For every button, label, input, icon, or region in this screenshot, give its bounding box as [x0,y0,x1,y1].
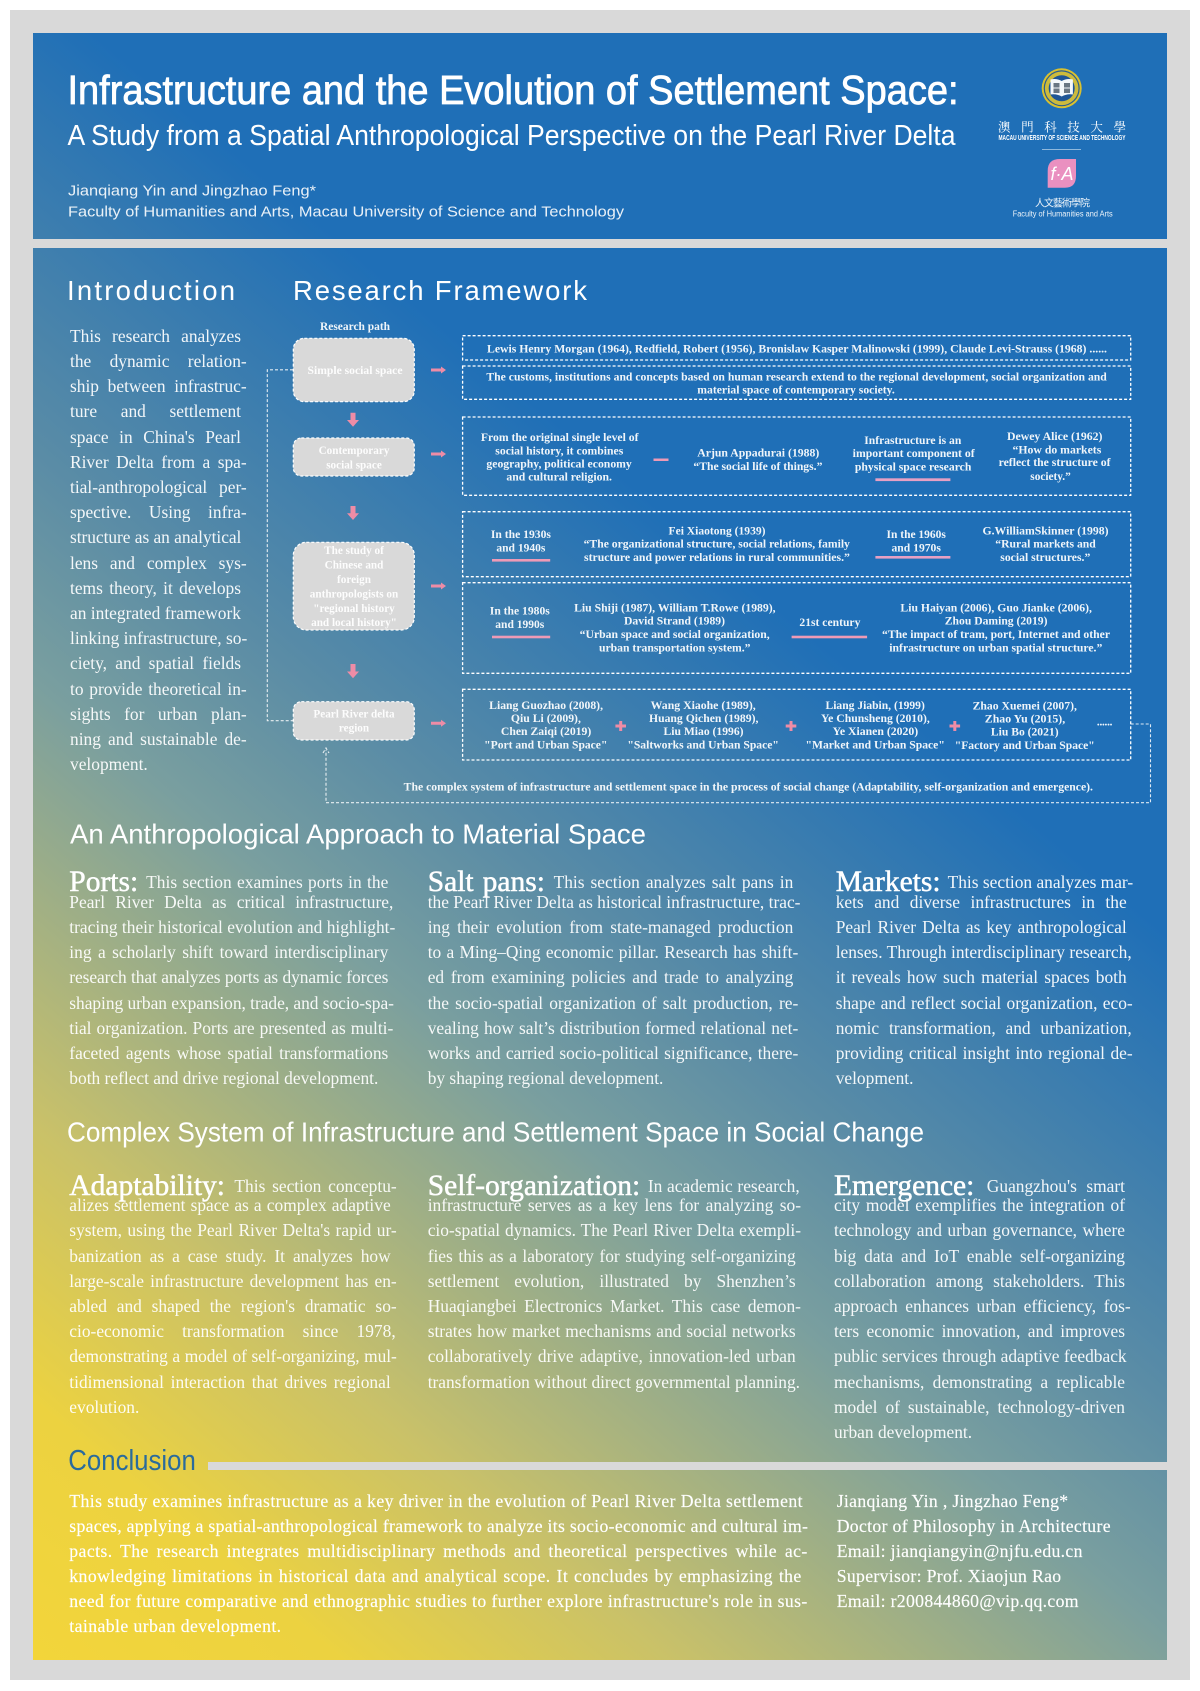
panel: contemporary social space literature: “The social life of things.” [693,461,823,473]
panel: pearl river delta literature: Ye Xianen (2020) [833,726,918,738]
text: ports: Pearl River Delta as critical infrastructure, [69,892,393,912]
text: introduction: River Delta from a spa- [70,452,247,472]
text: emergence: technology and urban governance, where [834,1220,1125,1240]
panel: contemporary social space literature: From the original single level of [481,432,639,444]
connector: left dashed bracket [267,370,293,721]
panel: 1930s to 1970s literature: In the 1960s [886,529,947,541]
panel: pearl river delta literature: Qiu Li (2009), [511,713,581,725]
text: contact details: Doctor of Philosophy in Architecture [837,1516,1111,1536]
text: markets: nomic transformation, and urbanization, [836,1018,1132,1038]
box: contemporary social space [293,438,414,476]
icon: university seal [1042,68,1082,108]
panel: 1980s to 21st century literature: urban transportation system.” [599,642,751,654]
text: conclusion: This study examines infrastructure as a key driver in the evolution of Pearl River Delta settlement [69,1491,803,1511]
text: ports: Ports: This section examines ports in the [69,866,388,898]
box: simple social space: Simple social space [308,365,403,377]
text: salt pans: ed from examining policies and trade to analyzing [428,967,793,987]
heading: Conclusion: Conclusion [68,1445,196,1477]
text: introduction: velopment. [70,754,148,774]
arrows: path downward [347,413,359,678]
panel: pearl river delta literature: ...... [1097,717,1113,729]
text: introduction: ciety, and spatial fields [70,653,241,673]
heading: Research Framework: Research Framework [293,275,587,306]
text: markets [836,866,1133,1088]
panel: pearl river delta literature: "Factory and Urban Space" [955,740,1095,752]
panel: 1980s to 21st century literature [463,583,1131,673]
panel: contemporary social space literature: geography, political economy [486,458,632,470]
faculty name: Faculty of Humanities and Arts [1013,210,1113,219]
text: emergence: approach enhances urban efficiency, fos- [834,1296,1131,1316]
panel: 1980s to 21st century literature: In the 1980s [490,606,550,618]
panel: contemporary social space literature: physical space research [855,461,972,473]
text: introduction: sights for urban plan- [70,704,247,724]
university name: 澳門科技大學 [998,120,1126,134]
panel: 1930s to 1970s literature: G.WilliamSkinner (1998) [982,526,1109,538]
text: introduction: tial-anthropological per- [70,477,247,497]
panel: pearl river delta literature: Chen Zaiqi (2019) [501,726,592,738]
box: simple social space [293,338,414,402]
text: self-organization: fies this as a laboratory for studying self-organizing [428,1246,796,1266]
text: self-organization: transformation without direct governmental planning. [428,1372,800,1392]
panel: 1930s to 1970s literature: In the 1930s [491,529,552,541]
panel: contemporary social space literature: and cultural religion. [506,472,612,484]
panel: 1980s to 21st century literature: “Urban space and social organization, [580,629,770,641]
text: self-organization [428,1170,801,1392]
text: salt pans: Salt pans: This section analyzes salt pans in [428,866,793,898]
text: conclusion: need for future comparative and ethnographic studies to further explore infrastructure's role in sus- [69,1591,808,1611]
text: markets: providing critical insight into regional de- [836,1043,1133,1063]
arrows: path rightward [431,366,446,727]
panel: 1930s to 1970s literature: and 1940s [496,542,546,554]
text: introduction: to provide theoretical in- [70,679,247,699]
faculty name: 人文藝術學院 [1035,196,1090,210]
text: adaptability: tidimensional interaction that drives regional [69,1372,391,1392]
panel: 1930s to 1970s literature [463,512,1131,577]
divider bar [208,1462,1167,1470]
text: emergence: Emergence: Guangzhou's smart [834,1170,1125,1202]
text: emergence: urban development. [834,1422,972,1442]
authors and affiliation [68,184,625,220]
panel: pearl river delta literature: Wang Xiaohe (1989), [651,700,756,712]
text: ports [69,866,395,1088]
panel: pearl river delta literature: Liu Miao (1996) [664,726,744,738]
panel: 1930s to 1970s literature: Fei Xiaotong (1939) [668,526,766,538]
connector: feedback arrow [323,724,1150,803]
text: adaptability: cio-economic transformation since 1978, [69,1321,396,1341]
text: introduction: ship between infrastruc- [70,376,247,396]
panel: 1980s to 21st century literature: infrastructure on urban spatial structure.” [889,642,1103,654]
text: self-organization: Huaqiangbei Electronics Market. This case demon- [428,1296,801,1316]
text: self-organization: settlement evolution, illustrated by Shenzhen’s [428,1271,796,1291]
text: self-organization: strates how market mechanisms and social networks [428,1321,796,1341]
label: research path: Research path [320,321,391,333]
text: introduction: This research analyzes [70,326,241,346]
panel: 1930s to 1970s literature: “The organizational structure, social relations, family [584,539,850,551]
text: emergence [834,1170,1131,1442]
panel: contemporary social space literature: society.” [1030,471,1071,483]
panel: pearl river delta literature: "Port and Urban Space" [484,739,607,751]
text: introduction: linking infrastructure, so- [70,628,247,648]
panel: extension statement: material space of contemporary society. [697,384,895,396]
text: ports: both reflect and drive regional development. [69,1068,378,1088]
text: markets: shape and reflect social organization, eco- [836,993,1133,1013]
text: salt pans: vealing how salt’s distribution formed relational net- [428,1018,798,1038]
box: study of anthropologists: and local history" [311,617,397,629]
panel: pearl river delta literature [463,689,1131,760]
text: introduction: lens and complex sys- [70,553,247,573]
box: pearl river delta region: region [339,723,370,735]
text: adaptability: large-scale infrastructure development has en- [69,1271,397,1291]
panel: contemporary social space literature: important component of [853,448,975,460]
authors and affiliation: Jianqiang Yin and Jingzhao Feng* [68,184,316,200]
panel: pearl river delta literature: Liang Guozhao (2008), [489,700,603,712]
text: adaptability: demonstrating a model of self-organizing, mul- [69,1346,397,1366]
text: ports: shaping urban expansion, trade, and socio-spa- [69,993,394,1013]
panel: 1980s to 21st century literature: Liu Shiji (1987), William T.Rowe (1989), [574,603,776,615]
text: conclusion: spaces, applying a spatial-anthropological framework to analyze its socio-economic and cultural im- [69,1516,808,1536]
box: study of anthropologists: The study of [324,545,384,557]
text: emergence: collaboration among stakeholders. This [834,1271,1125,1291]
text: emergence: ters economic innovation, and improves [834,1321,1125,1341]
panel: extension statement [463,366,1131,399]
caption: complex system: The complex system of infrastructure and settlement space in the process of social change (Adaptability, self-organization and emergence). [404,782,1093,794]
panel: header [33,33,1167,239]
text: ports: research that analyzes ports as dynamic forces [69,967,388,987]
panel: founding anthropologists [463,336,1131,360]
text: emergence: big data and IoT enable self-organizing [834,1246,1125,1266]
text: salt pans: ing their evolution from state-managed production [428,917,793,937]
panel: conclusion [33,1470,1167,1660]
icon: faculty logo: f·A [1050,164,1074,184]
title: Infrastructure and the Evolution of Settlement Space: [68,67,958,113]
text: emergence: mechanisms, demonstrating a replicable [834,1372,1125,1392]
box: study of anthropologists: Chinese and [325,560,384,572]
text: self-organization: infrastructure serves as a key lens for analyzing so- [428,1195,801,1215]
box: pearl river delta region: Pearl River delta [313,708,395,720]
text: conclusion [69,1491,808,1636]
panel: 1980s to 21st century literature: and 1990s [495,619,545,631]
text: ports: tracing their historical evolution and highlight- [69,917,395,937]
text: introduction: the dynamic relation- [70,351,247,371]
panel: contemporary social space literature: reflect the structure of [999,457,1111,469]
title: A Study from a Spatial Anthropological Perspective on the Pearl River Delta [68,120,956,152]
text: ports: ing a scholarly shift toward interdisciplinary [69,942,388,962]
panel: pearl river delta literature: Zhao Xuemei (2007), [973,701,1077,713]
panel: pearl river delta literature: Ye Chunsheng (2010), [821,713,930,725]
text: emergence: city model exemplifies the integration of [834,1195,1125,1215]
text: introduction: ture and settlement [70,401,241,421]
panel: founding anthropologists: Lewis Henry Morgan (1964), Redfield, Robert (1956), Bronislaw Kasper Malinowski (1999), Claude Levi-Strauss (1968) ...... [487,343,1107,355]
text: conclusion: knowledging limitations in historical data and analytical scope. It concludes by emphasizing the [69,1566,802,1586]
panel: 1930s to 1970s literature: structure and power relations in rural communities.” [584,552,850,564]
university name [998,120,1126,142]
text: salt pans: works and carried socio-political significance, there- [428,1043,798,1063]
panel: contemporary social space literature: Arjun Appadurai (1988) [697,448,820,460]
box: contemporary social space: social space [326,459,382,471]
text: self-organization: Self-organization: In academic research, [428,1170,800,1202]
text: ports: faceted agents whose spatial transformations [69,1043,388,1063]
text: contact details: Jianqiang Yin , Jingzhao Feng* [837,1491,1068,1511]
panel: contemporary social space literature: social history, it combines [495,445,624,457]
box: study of anthropologists: foreign [337,574,372,586]
text: adaptability: Adaptability: This section conceptu- [69,1170,397,1202]
text: introduction: ning and sustainable de- [70,729,247,749]
text: adaptability: alizes settlement space as a complex adaptive [69,1195,391,1215]
text: introduction: structure as an analytical [70,527,241,547]
icon: faculty logo [1048,159,1076,188]
text: contact details: Supervisor: Prof. Xiaojun Rao [837,1566,1061,1586]
text: adaptability: system, using the Pearl River Delta's rapid ur- [69,1220,397,1240]
text: adaptability: evolution. [69,1397,139,1417]
faculty name [1013,196,1113,219]
text: salt pans: to a Ming–Qing economic pillar. Research has shift- [428,942,798,962]
text: contact details: Email: jianqiangyin@njfu.edu.cn [837,1541,1083,1561]
university name: MACAU UNIVERSITY OF SCIENCE AND TECHNOLOGY [998,135,1126,142]
panel: contemporary social space literature [463,417,1131,495]
text: introduction: tems theory, it develops [70,578,241,598]
text: self-organization: collaboratively drive adaptive, innovation-led urban [428,1346,796,1366]
text: conclusion: tainable urban development. [69,1616,282,1636]
panel: main content [33,248,1167,1462]
panel: 1980s to 21st century literature: Liu Haiyan (2006), Guo Jianke (2006), [900,603,1092,615]
panel: 1980s to 21st century literature: 21st century [799,617,861,629]
panel: 1980s to 21st century literature: Zhou Daming (2019) [945,616,1048,628]
panel: contemporary social space literature: Infrastructure is an [864,435,962,447]
panel: 1980s to 21st century literature: “The impact of tram, port, Internet and other [882,629,1110,641]
panel: pearl river delta literature: Liu Bo (2021) [991,727,1059,739]
text: adaptability: abled and shaped the region's dramatic so- [69,1296,397,1316]
box: pearl river delta region [293,702,414,740]
text: introduction: an integrated framework [70,603,241,623]
panel: pearl river delta literature: "Saltworks and Urban Space" [627,739,779,751]
text: salt pans: the Pearl River Delta as historical infrastructure, trac- [428,892,800,912]
heading: An Anthropological Approach: An Anthropological Approach to Material Space [70,818,646,850]
heading: Introduction: Introduction [67,275,235,306]
panel: pearl river delta literature: Zhao Yu (2015), [985,714,1065,726]
text: contact details: Email: r200844860@vip.qq.com [837,1591,1079,1611]
box: study of anthropologists: anthropologists on [310,588,399,600]
text: markets: velopment. [836,1068,913,1088]
text: contact details [837,1491,1111,1612]
panel: extension statement: The customs, institutions and concepts based on human research extend to the regional development, social organization and [486,372,1108,384]
panel: conclusion heading patch [33,1462,208,1470]
text: introduction: space in China's Pearl [70,427,241,447]
panel: 1930s to 1970s literature: “Rural markets and [995,539,1097,551]
box: study of anthropologists: "regional history [313,603,395,615]
text: adaptability: banization as a case study. It analyzes how [69,1246,391,1266]
text: introduction [70,326,247,774]
research framework diagram [267,321,1150,803]
panel: 1930s to 1970s literature: and 1970s [892,542,942,554]
text: salt pans: by shaping regional development. [428,1068,663,1088]
panel: 1930s to 1970s literature: social structures.” [1000,552,1091,564]
text: adaptability [69,1170,397,1417]
box: contemporary social space: Contemporary [319,445,390,457]
panel: pearl river delta literature: Huang Qichen (1989), [649,713,759,725]
box: study of anthropologists [293,542,414,630]
panel: contemporary social space literature: Dewey Alice (1962) [1007,431,1103,443]
text: salt pans: the socio-spatial organization of salt production, re- [428,993,798,1013]
panel: pearl river delta literature: Liang Jiabin, (1999) [826,700,925,712]
panel: pearl river delta literature: "Market and Urban Space" [806,739,945,751]
text: ports: tial organization. Ports are presented as multi- [69,1018,393,1038]
title [68,67,958,152]
text: conclusion: pacts. The research integrates multidisciplinary methods and theoretical perspectives while ac- [69,1541,808,1561]
text: markets: lenses. Through interdisciplinary research, [836,942,1132,962]
text: introduction: spective. Using infra- [70,502,247,522]
text: markets: Markets: This section analyzes mar- [836,866,1133,898]
panel: 1980s to 21st century literature: David Strand (1989) [624,616,725,628]
text: self-organization: cio-spatial dynamics. The Pearl River Delta exempli- [428,1220,801,1240]
text: salt pans [428,866,800,1088]
text: markets: it reveals how such material spaces both [836,967,1127,987]
text: emergence: model of sustainable, technology-driven [834,1397,1125,1417]
panel: contemporary social space literature: “How do markets [1012,444,1102,456]
authors and affiliation: Faculty of Humanities and Arts, Macau University of Science and Technology [68,204,625,220]
heading: Complex System: Complex System of Infrastructure and Settlement Space in Social Change [67,1116,924,1148]
text: markets: kets and diverse infrastructures in the [836,892,1127,912]
text: markets: Pearl River Delta as key anthropological [836,917,1127,937]
text: emergence: public services through adaptive feedback [834,1346,1127,1366]
